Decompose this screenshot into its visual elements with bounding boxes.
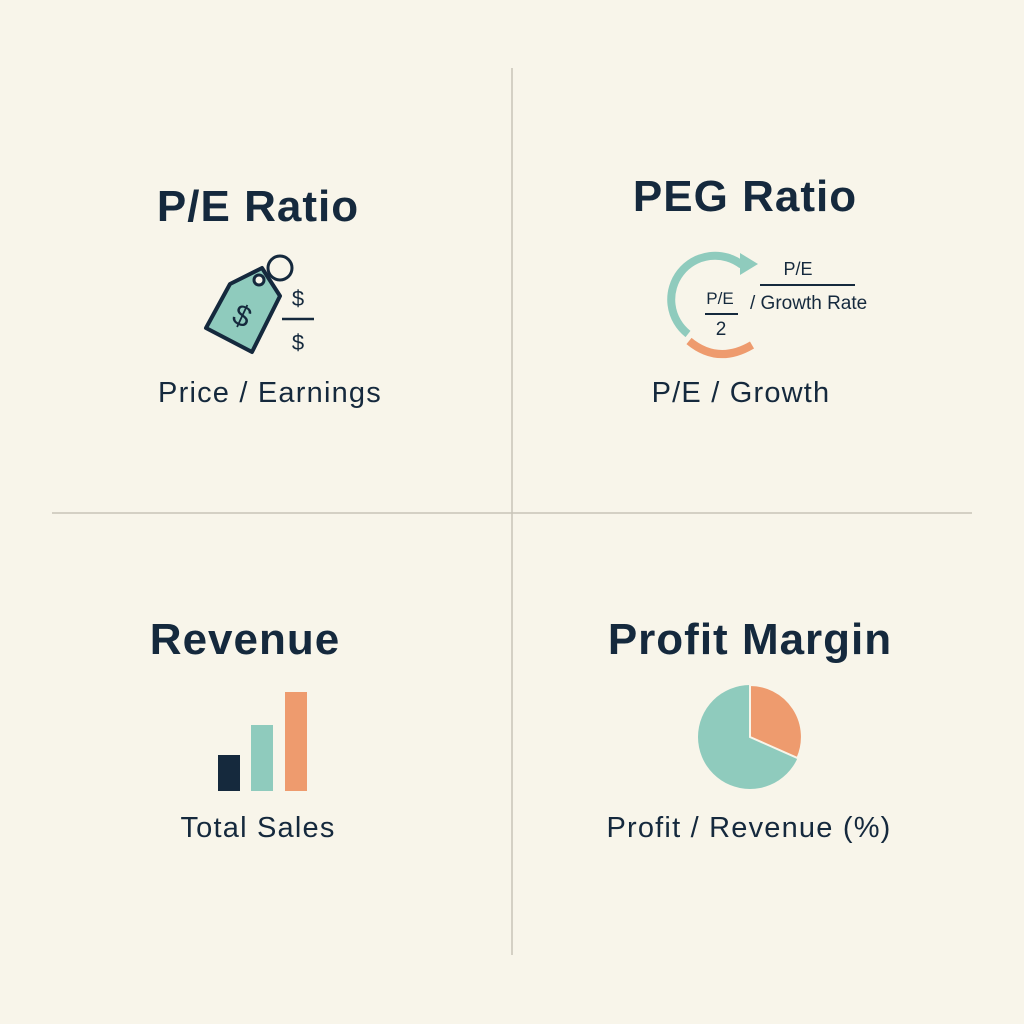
subtitle: Total Sales: Total Sales <box>180 812 336 844</box>
icon: PEG cycle and formula: / Growth Rate <box>750 293 867 314</box>
subtitle: P/E / Growth: P/E / Growth <box>652 377 830 409</box>
icon: PEG cycle and formula: P/E <box>706 289 734 308</box>
icon: PEG cycle and formula: P/E <box>783 259 813 279</box>
title: PEG Ratio: PEG Ratio <box>633 172 857 221</box>
icon: PEG cycle and formula: 2 <box>716 319 726 340</box>
subtitle: Price / Earnings: Price / Earnings <box>158 377 382 409</box>
icon: price tag with dollar fraction: $ <box>292 286 304 311</box>
icon: price tag with dollar fraction: $ <box>227 298 257 335</box>
icon: price tag with dollar fraction: $ <box>292 330 304 355</box>
icon: PEG cycle and formula <box>667 252 867 358</box>
title: Revenue: Revenue <box>150 615 340 664</box>
bar chart <box>218 692 307 791</box>
title: P/E Ratio: P/E Ratio <box>157 182 359 231</box>
title: Profit Margin: Profit Margin <box>608 615 892 664</box>
pie chart <box>698 685 801 789</box>
icon: price tag with dollar fraction <box>204 254 314 355</box>
subtitle: Profit / Revenue (%): Profit / Revenue (%) <box>606 812 892 844</box>
